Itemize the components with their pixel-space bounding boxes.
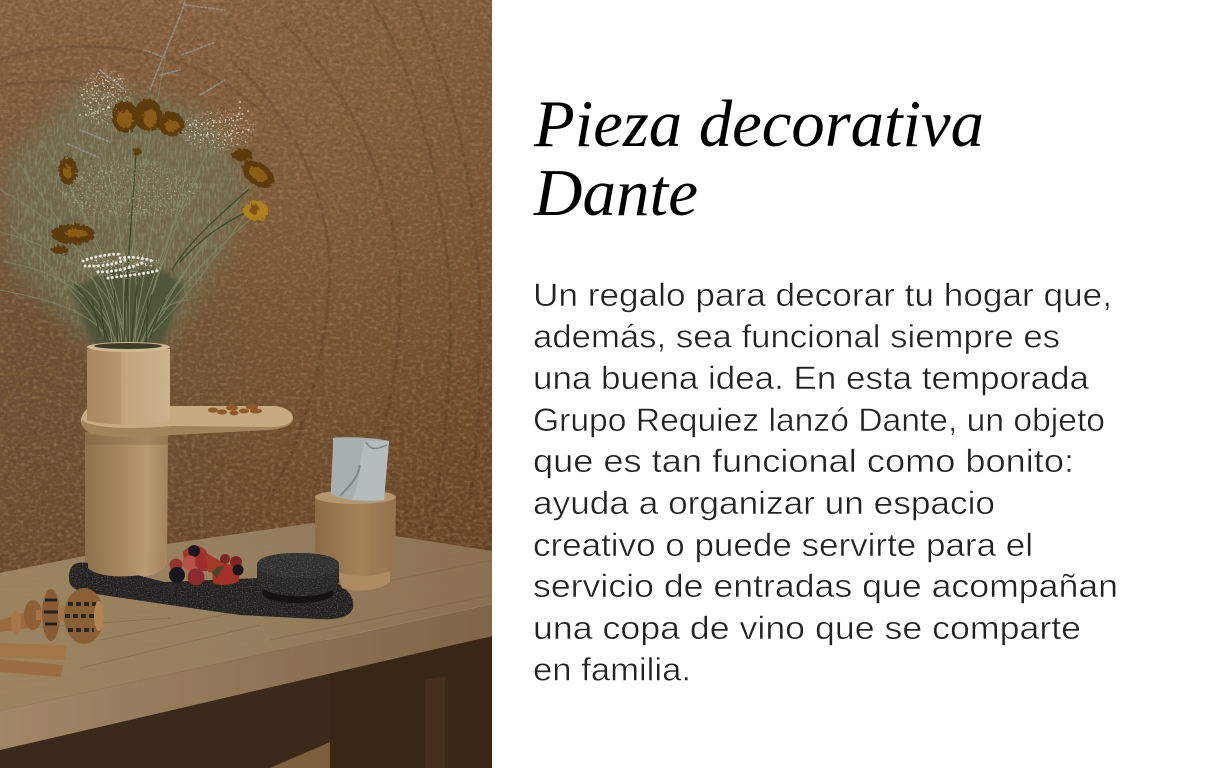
body text: además, sea funcional siempre es [533,318,1060,354]
folded linen cloth [331,437,389,501]
small oak cup [315,490,396,590]
fresh berries [169,545,244,586]
body text: Grupo Requiez lanzó Dante, un objeto [533,402,1105,438]
title [533,87,984,230]
almonds [208,404,262,416]
white gypsophila [60,68,257,280]
lavender sprigs [68,0,225,158]
stems [0,60,262,345]
body text: que es tan funcional como bonito: [533,443,1074,479]
lava stone tray [69,562,354,620]
title: Dante [533,156,698,230]
dried yellow blooms [51,99,279,254]
woven jute rug background [0,0,492,600]
table front edge [0,604,492,750]
shelf [80,406,293,428]
Dante vase and shelf in oak [81,342,293,578]
table [0,520,492,768]
body text: una copa de vino que se comparte [533,610,1081,646]
body text: ayuda a organizar un espacio [533,485,995,521]
wooden molinillo [0,588,104,644]
body text [533,277,1118,688]
basalt disc [257,553,339,603]
table leg [475,636,492,640]
tall vase base over tray [88,563,138,576]
body text: Un regalo para decorar tu hogar que, [533,277,1112,313]
photo: Dante decorative piece on a wooden table [0,0,492,768]
body text: creativo o puede servirte para el [533,527,1033,563]
wooden sticks [0,643,67,677]
body text: servicio de entradas que acompañan [533,568,1118,604]
title: Pieza decorativa [533,87,984,161]
body text: una buena idea. En esta temporada [533,360,1089,396]
table top surface [0,523,492,711]
dark underside and rug below [0,640,492,768]
body text: en familia. [533,652,691,688]
dried flower bouquet [0,0,279,350]
lower column [85,432,168,578]
upper vase [87,349,170,424]
